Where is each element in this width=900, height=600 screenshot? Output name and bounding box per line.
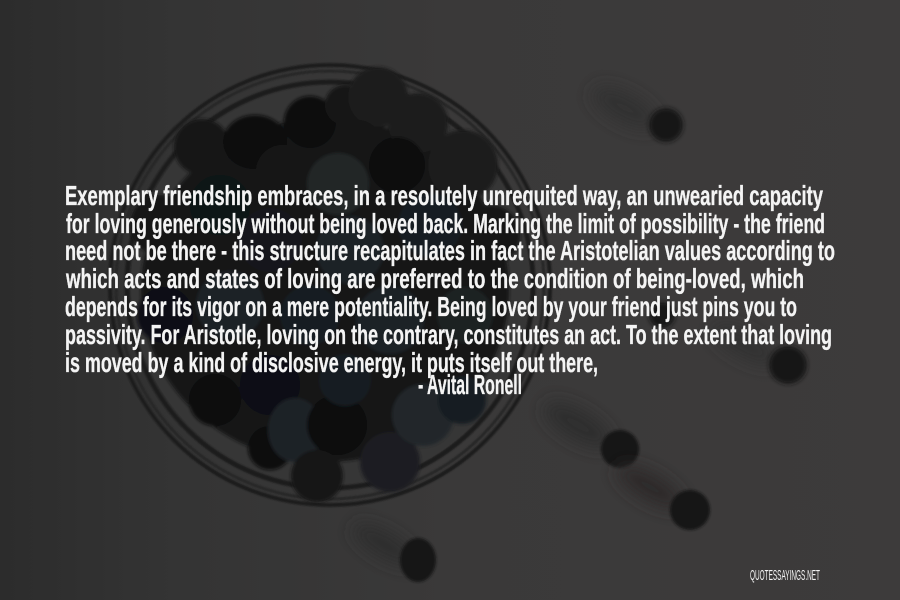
author attribution: - Avital Ronell	[418, 369, 522, 400]
quote text	[65, 180, 835, 378]
icon: glass bowl of blueberries	[110, 65, 550, 505]
icon: blueberry middle right	[538, 393, 639, 468]
bowl rim rings	[110, 65, 550, 505]
blueberries	[130, 67, 520, 502]
icon: blueberry top right	[586, 78, 683, 142]
quote text: is moved by a kind of disclosive energy, it puts itself out there,	[65, 347, 598, 378]
icon: blueberry below the bowl	[347, 516, 436, 582]
bowl interior	[131, 86, 529, 484]
icon: blueberry lower right	[610, 456, 710, 530]
icon: blueberry right	[707, 317, 807, 384]
icon: blueberry behind the text	[649, 302, 675, 328]
